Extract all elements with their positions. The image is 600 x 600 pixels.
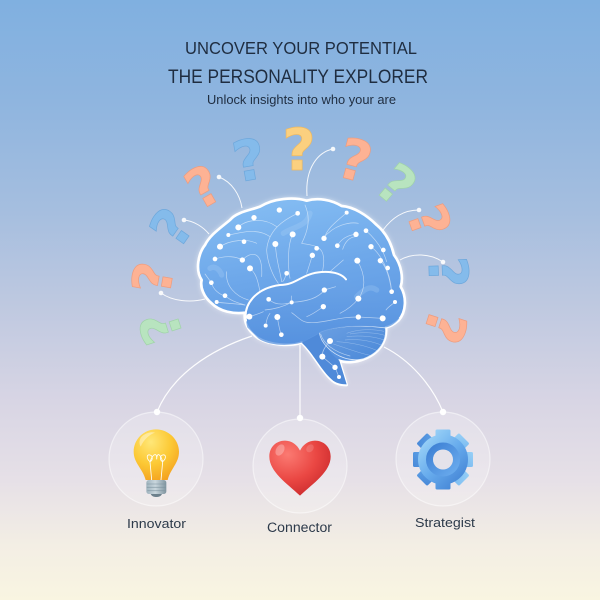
question mark: green lower left: ? bbox=[127, 303, 196, 352]
temporal lobe bbox=[246, 272, 399, 345]
connector bubble bbox=[253, 419, 347, 513]
strategist node bbox=[440, 409, 446, 415]
panel: innovator bbox=[109, 409, 203, 531]
sulci lines bbox=[205, 205, 395, 377]
cerebellum bbox=[319, 326, 385, 360]
question mark: orange right: ? bbox=[394, 196, 464, 247]
question mark: orange top right: ? bbox=[331, 126, 379, 197]
branches from brain to archetypes bbox=[157, 336, 443, 418]
connector node bbox=[297, 415, 303, 421]
innovator node bbox=[154, 409, 160, 415]
question mark: green upper right: ? bbox=[364, 151, 428, 219]
strategist bubble bbox=[396, 412, 490, 506]
icon: gear bbox=[413, 430, 473, 490]
subtitle: Unlock insights into who your are bbox=[207, 93, 396, 107]
innovator bubble bbox=[109, 412, 203, 506]
question mark: yellow top: ? bbox=[282, 116, 316, 184]
title bbox=[168, 38, 428, 107]
panel: strategist bbox=[396, 409, 490, 530]
neural nodes bbox=[209, 207, 397, 379]
label: strategist: Strategist bbox=[415, 515, 475, 530]
question mark: blue top left: ? bbox=[228, 127, 271, 196]
question mark: blue right: ? bbox=[415, 255, 480, 289]
icon: light bulb bbox=[134, 429, 179, 497]
question mark: orange upper left: ? bbox=[174, 152, 233, 222]
question mark: orange lower right: ? bbox=[410, 302, 479, 351]
brain stem bbox=[302, 333, 347, 384]
question mark: orange left: ? bbox=[120, 257, 187, 299]
highlight folds bbox=[210, 213, 377, 297]
brain bbox=[198, 199, 405, 385]
question marks ring bbox=[120, 116, 480, 352]
panel: connector bbox=[253, 415, 347, 535]
connector lines from question marks to brain bbox=[159, 147, 445, 301]
title line 2: THE PERSONALITY EXPLORER bbox=[168, 67, 428, 88]
icon: heart bbox=[269, 441, 331, 496]
title line 1: UNCOVER YOUR POTENTIAL bbox=[185, 38, 417, 58]
label: connector: Connector bbox=[267, 520, 333, 535]
question mark: blue left: ? bbox=[137, 197, 207, 259]
label: innovator: Innovator bbox=[127, 516, 187, 531]
